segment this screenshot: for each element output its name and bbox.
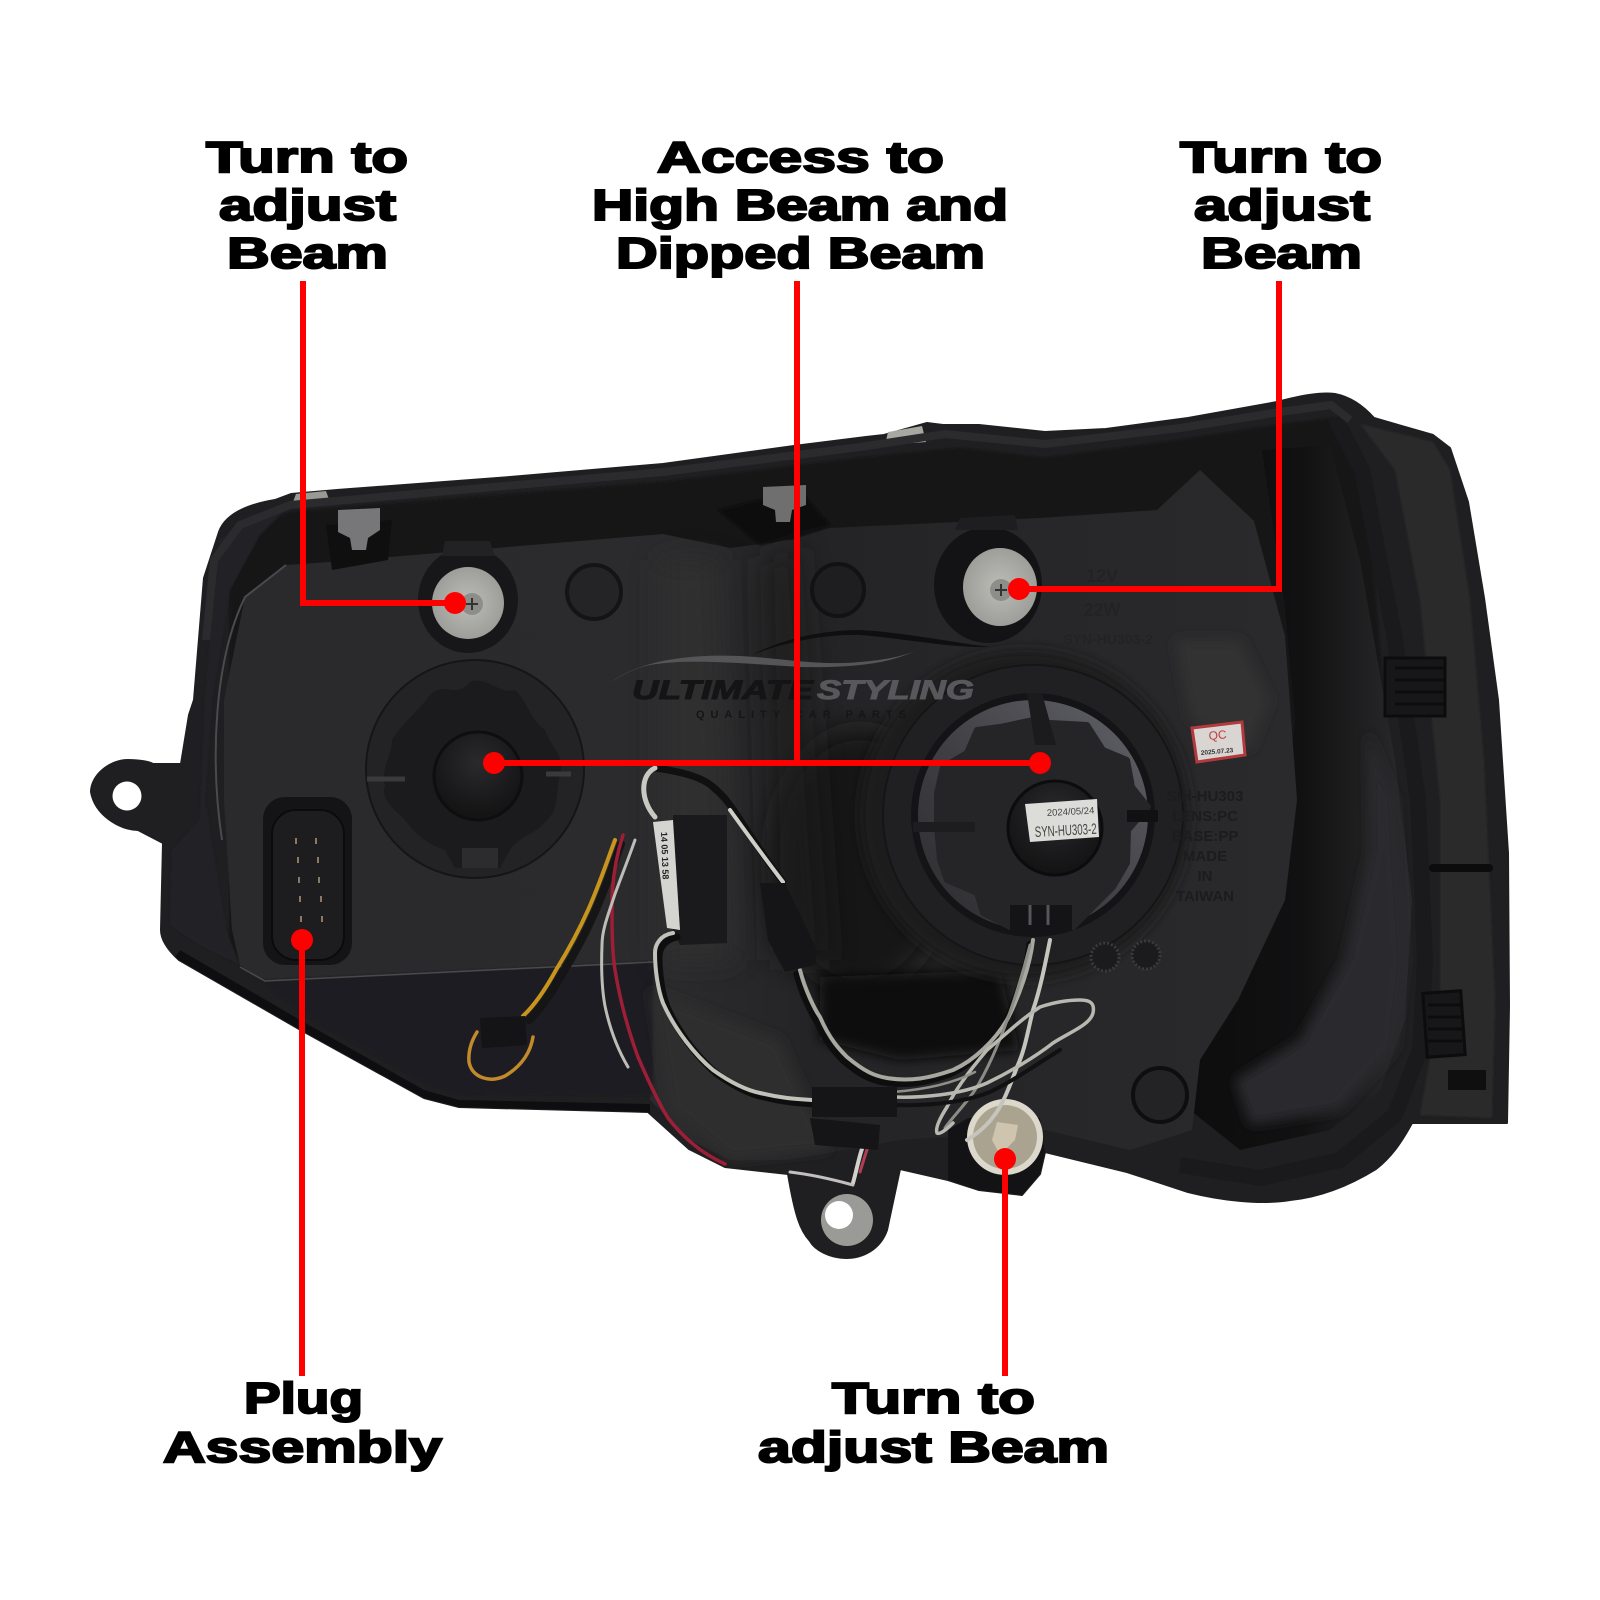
lower tank shading bbox=[652, 994, 818, 1150]
callout: lower beam adjuster bbox=[994, 1148, 1016, 1376]
label: turn to adjust beam, top left bbox=[206, 133, 408, 278]
wires: left bundle bbox=[469, 835, 725, 1164]
embossed housing text: MADE bbox=[1183, 848, 1227, 865]
right fins bbox=[1385, 658, 1489, 1090]
blanking plug right bbox=[812, 564, 864, 616]
embossed housing text: 22W bbox=[1083, 600, 1121, 620]
bracket centre bbox=[763, 485, 806, 522]
label: turn to adjust beam, top right: adjust bbox=[1194, 181, 1370, 230]
centre dark mass bbox=[803, 720, 931, 982]
plug socket bbox=[263, 797, 352, 965]
top channel mount left bbox=[331, 557, 388, 570]
QC sticker: QC bbox=[1208, 727, 1228, 743]
embossed housing text bbox=[1063, 566, 1243, 905]
label: plug assembly: Assembly bbox=[163, 1423, 443, 1472]
watermark: STYLING bbox=[817, 675, 974, 705]
right recess bbox=[1194, 527, 1412, 1150]
metal clip top centre bbox=[885, 426, 926, 445]
bulb cover label: SYN-HU303-2 bbox=[1034, 821, 1097, 841]
label: turn to adjust beam, bottom bbox=[758, 1374, 1109, 1472]
left adjuster screw bbox=[418, 541, 518, 653]
embossed housing text: TAIWAN bbox=[1176, 888, 1234, 905]
left mounting hole bbox=[112, 782, 142, 810]
label: access to high beam and dipped beam bbox=[592, 133, 1008, 278]
bulb cover label bbox=[1025, 799, 1099, 842]
right lens flange bbox=[1360, 424, 1495, 1118]
embossed housing text: LENS:PC bbox=[1172, 808, 1238, 825]
recess lit face bbox=[1233, 761, 1387, 1128]
QC sticker: 2025.07.23 bbox=[1201, 747, 1234, 757]
label: turn to adjust beam, bottom: adjust Beam bbox=[758, 1423, 1109, 1472]
watermark: ULTIMATE bbox=[632, 675, 814, 705]
lower lip bbox=[170, 950, 650, 1116]
bulb cover label: 2024/05/24 bbox=[1047, 806, 1095, 819]
embossed housing text: SYN-HU303-2 bbox=[1063, 631, 1153, 647]
callout: high beam and dipped beam access bbox=[483, 281, 1051, 774]
label: plug assembly bbox=[163, 1374, 443, 1472]
date wheels bbox=[1091, 941, 1160, 971]
panel dark band bbox=[771, 558, 801, 784]
label: turn to adjust beam, bottom: Turn to bbox=[832, 1374, 1035, 1423]
top channel mount right bbox=[719, 497, 829, 546]
panel rib shading bbox=[660, 560, 735, 960]
right adjuster screw bbox=[934, 515, 1042, 643]
inline connectors bbox=[760, 883, 897, 1150]
left bulb cover bbox=[366, 660, 584, 878]
label: turn to adjust beam, top right: Turn to bbox=[1180, 133, 1382, 182]
wires: centre harness bbox=[644, 768, 1093, 1185]
label: access to high beam and dipped beam: High Beam and bbox=[592, 181, 1008, 230]
lower left body bbox=[262, 962, 653, 1095]
label: turn to adjust beam, top left: adjust bbox=[219, 181, 396, 230]
embossed housing text: BASE:PP bbox=[1172, 828, 1238, 845]
central shadow bbox=[820, 970, 1020, 1060]
headlight unit bbox=[91, 393, 1509, 1258]
rim highlight bbox=[206, 405, 1350, 640]
small connector bbox=[480, 1016, 527, 1048]
callout: top right beam adjuster bbox=[1008, 281, 1279, 600]
wiring module: 14 05 13 58 bbox=[659, 832, 671, 880]
inner rim bbox=[1365, 484, 1370, 546]
QC sticker bbox=[1192, 722, 1245, 762]
callout: plug assembly bbox=[291, 929, 313, 1376]
label: turn to adjust beam, top left: Beam bbox=[227, 229, 388, 278]
lower adjuster bbox=[948, 1099, 1045, 1195]
lower mounting lug bbox=[821, 1194, 873, 1246]
label: access to high beam and dipped beam: Dipped Beam bbox=[616, 229, 985, 278]
blanking plug left bbox=[567, 565, 621, 619]
label: access to high beam and dipped beam: Access to bbox=[657, 133, 944, 182]
bracket left bbox=[338, 508, 380, 550]
left thin highlight bbox=[216, 565, 286, 840]
embossed housing text: 12V bbox=[1086, 566, 1118, 586]
housing silhouette bbox=[91, 393, 1509, 1258]
watermark: QUALITY CAR PARTS bbox=[696, 709, 906, 721]
label: plug assembly: Plug bbox=[244, 1374, 363, 1423]
wiring module bbox=[653, 815, 727, 945]
left frame bbox=[228, 514, 279, 962]
main panel bbox=[224, 470, 1297, 1160]
callout lines and dots bbox=[291, 281, 1279, 1376]
panel lower edge highlight bbox=[240, 962, 653, 981]
embossed housing text: SIH-HU303 bbox=[1167, 788, 1243, 805]
label: turn to adjust beam, top left: Turn to bbox=[206, 133, 408, 182]
callout: top left beam adjuster bbox=[303, 281, 466, 614]
label: turn to adjust beam, top right bbox=[1180, 133, 1382, 278]
lower right peg bbox=[1133, 1068, 1187, 1122]
label: turn to adjust beam, top right: Beam bbox=[1201, 229, 1362, 278]
watermark bbox=[610, 630, 990, 721]
metal clip top left bbox=[291, 491, 331, 507]
panel soft patches bbox=[1183, 646, 1262, 736]
right bulb cover bbox=[860, 650, 1190, 980]
embossed housing text: IN bbox=[1198, 868, 1212, 885]
top channel bbox=[230, 418, 1384, 958]
